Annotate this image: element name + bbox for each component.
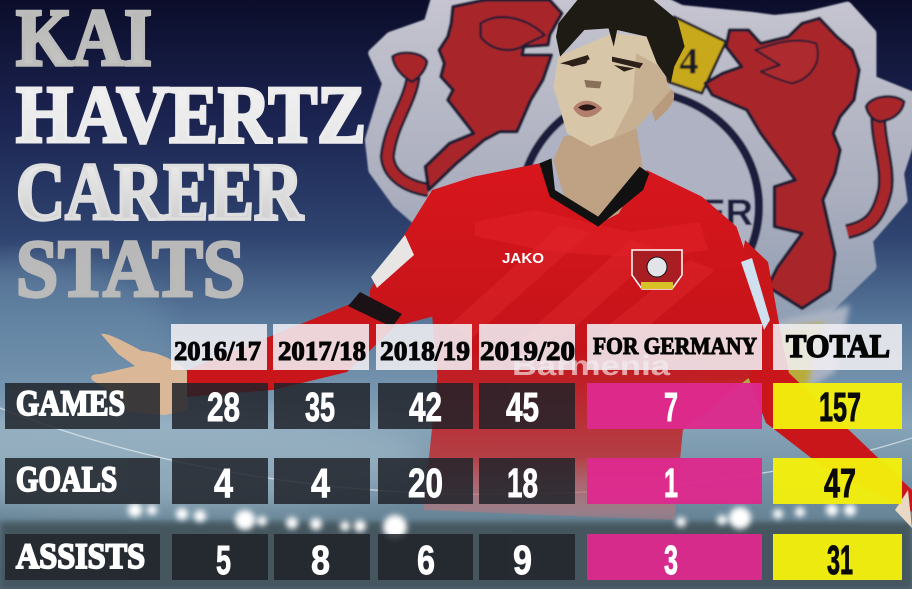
jersey torso <box>370 163 768 520</box>
title <box>16 0 366 314</box>
right arm <box>730 240 912 512</box>
yellow shield <box>667 17 726 93</box>
row: goals: 1 <box>664 460 678 506</box>
row: assists <box>5 534 902 583</box>
row: games: 35 <box>305 384 335 430</box>
column headers: 2018/19 <box>380 336 470 366</box>
left arm sleeve <box>187 304 400 397</box>
row: games <box>5 383 902 430</box>
row: goals: GOALS <box>16 459 117 499</box>
right lion <box>705 18 859 308</box>
row: assists: 5 <box>216 537 231 583</box>
row: assists: 3 <box>664 537 678 583</box>
row: assists: 6 <box>417 537 435 583</box>
column headers: 2016/17 <box>174 336 261 366</box>
jersey badge <box>632 250 682 289</box>
row: games: 45 <box>506 384 539 430</box>
title line: HAVERTZ: HAVERTZ <box>16 69 366 160</box>
row: goals: 20 <box>408 460 443 506</box>
row: games: 42 <box>409 384 442 430</box>
left hand <box>91 334 188 415</box>
jersey stripes <box>450 225 715 350</box>
yellow shield: 4 <box>679 42 698 82</box>
Bayer Leverkusen crest <box>370 0 912 333</box>
column headers: 2017/18 <box>278 336 366 366</box>
stats table <box>5 324 902 583</box>
face <box>553 33 671 147</box>
eyes and brows <box>560 55 643 72</box>
left lion face detail <box>481 17 545 50</box>
column headers: FOR GERMANY <box>593 334 757 360</box>
black sleeve band <box>348 292 402 327</box>
bundesliga sleeve patch <box>371 235 414 288</box>
crest white outline <box>370 0 912 333</box>
right hand <box>895 490 912 528</box>
row: assists: ASSISTS <box>16 536 145 576</box>
ear <box>652 88 674 122</box>
title line: STATS: STATS <box>16 223 245 314</box>
crest ribbon low right <box>690 305 850 386</box>
row: goals: 4 <box>311 460 330 506</box>
crest lettering: ER <box>700 192 753 233</box>
column headers <box>171 324 902 370</box>
jersey shoulder seam <box>475 210 708 258</box>
nose <box>584 80 602 88</box>
left lion tail <box>387 53 429 190</box>
mouth <box>573 101 602 117</box>
neck <box>553 127 643 224</box>
crest ring <box>520 92 759 322</box>
row: games: 7 <box>664 384 678 430</box>
row: goals: 4 <box>214 460 233 506</box>
row: games: 28 <box>207 384 240 430</box>
right lion face detail <box>755 41 818 83</box>
title line: CAREER: CAREER <box>16 146 304 237</box>
head and neck <box>539 0 685 227</box>
row: assists: 8 <box>311 537 330 583</box>
column headers: 2019/20 <box>480 336 575 366</box>
collar <box>539 158 649 227</box>
shirt sponsor: Barmenia <box>512 350 671 381</box>
row: games: GAMES <box>16 383 125 423</box>
row: goals: 47 <box>824 460 856 506</box>
JAKO logo: JAKO <box>502 250 544 267</box>
row: goals: 18 <box>507 460 538 506</box>
row: games: 157 <box>819 384 861 430</box>
right lion tail <box>847 96 904 232</box>
row: goals <box>5 458 902 506</box>
left lion <box>425 0 562 190</box>
sleeve sponsor <box>741 258 770 330</box>
column headers: TOTAL <box>786 329 890 365</box>
row: assists: 31 <box>827 537 853 583</box>
row: assists: 9 <box>513 537 532 583</box>
cheek shadow <box>612 53 671 140</box>
hair <box>556 0 685 83</box>
